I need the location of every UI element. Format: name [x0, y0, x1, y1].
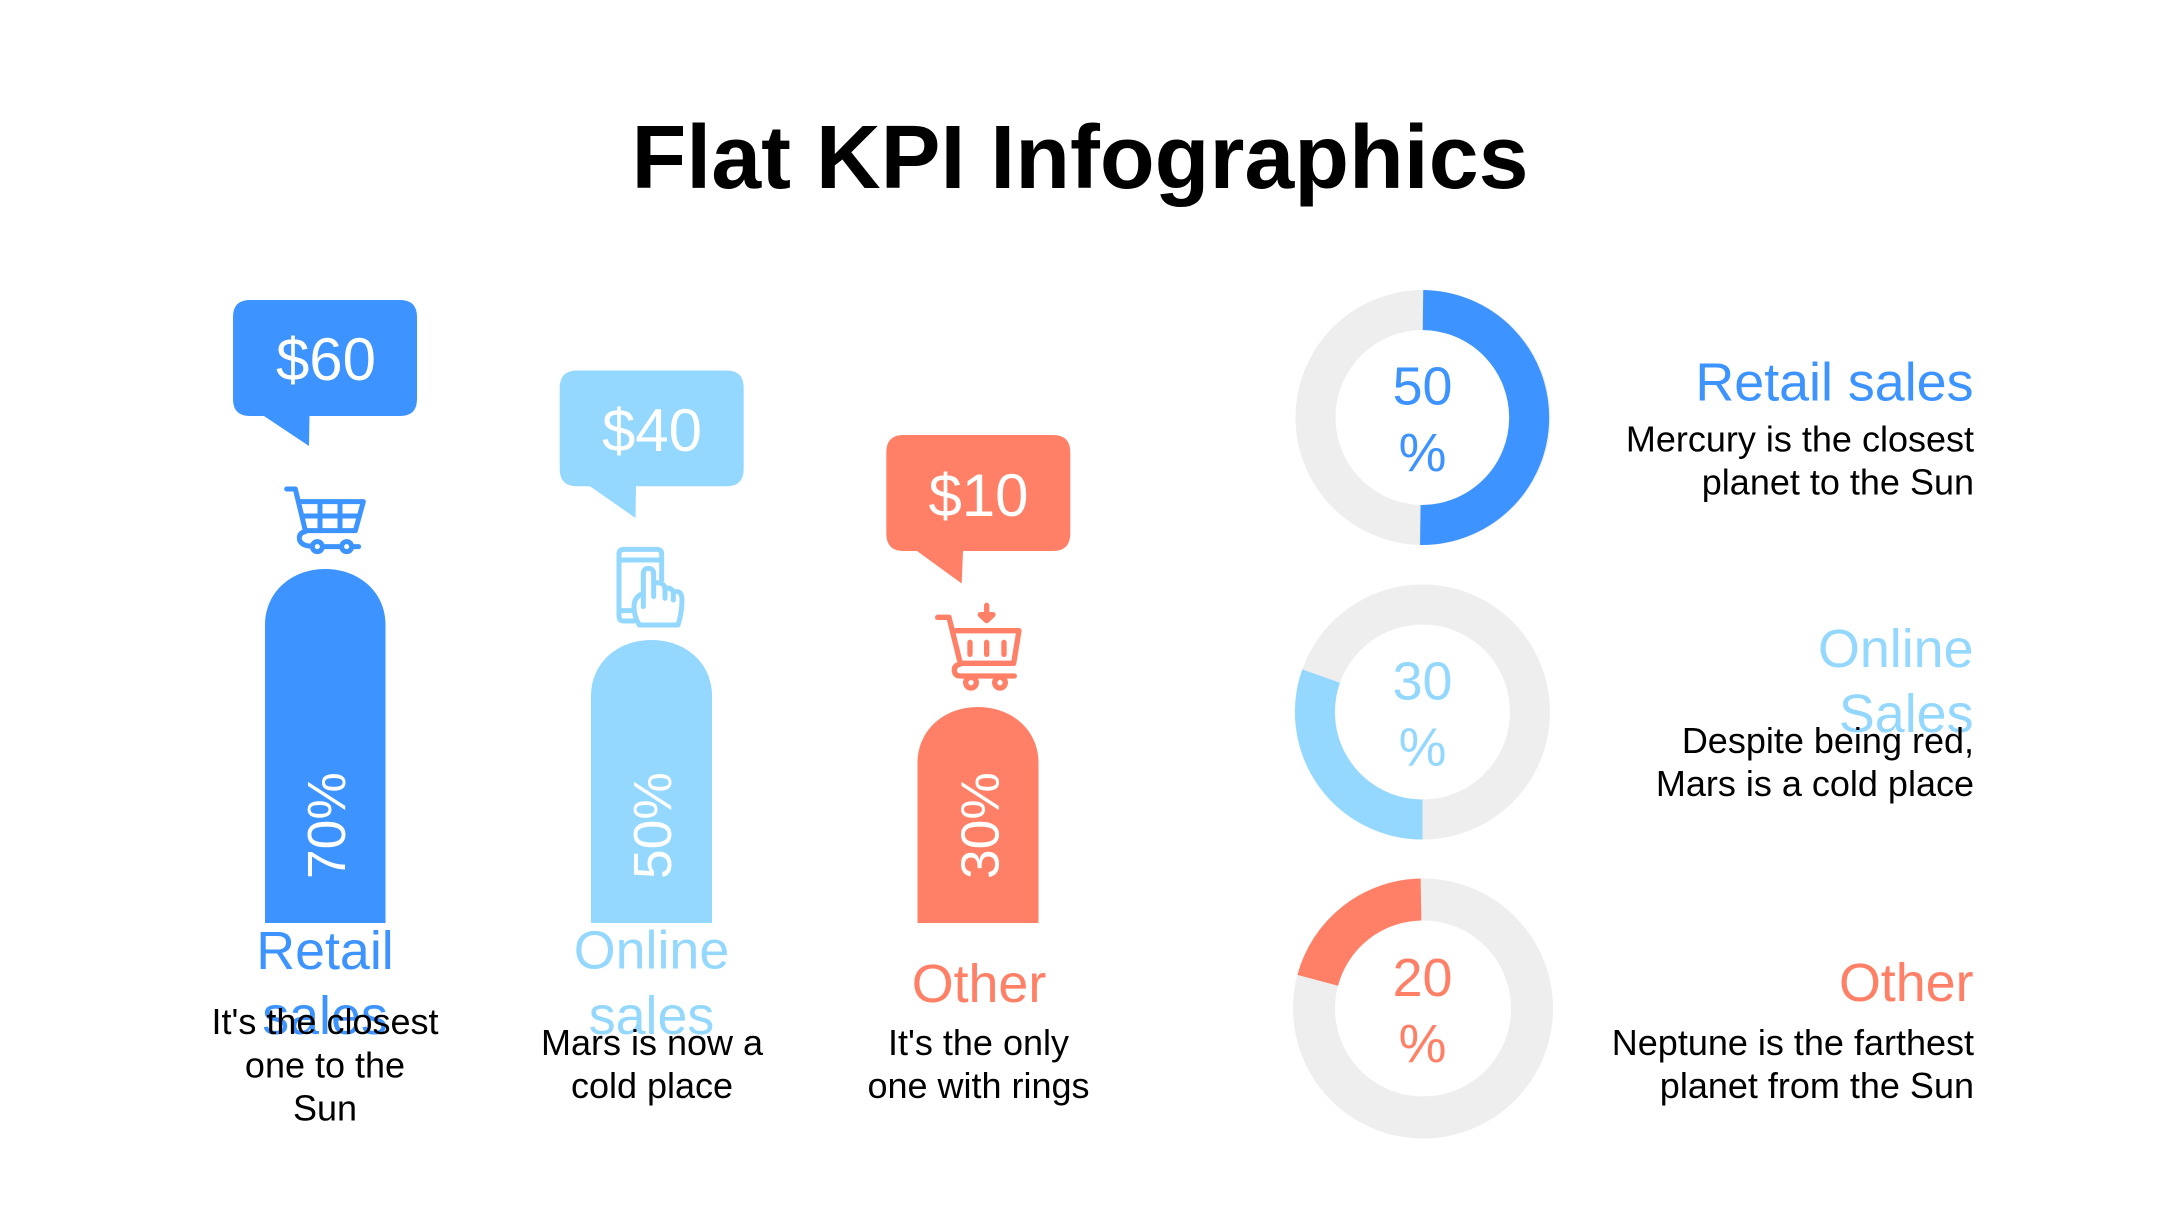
- text: mercury description: [1626, 418, 1974, 502]
- text: other description: [867, 1022, 1090, 1106]
- chart: 30% donut: [1315, 604, 1530, 820]
- icon: shopping cart: [287, 489, 363, 552]
- chart: 20% donut: [1314, 900, 1532, 1118]
- callout: $10 speech bubble: [886, 435, 1070, 584]
- heading: retail sales: [256, 921, 394, 1046]
- text: neptune description: [1612, 1022, 1974, 1106]
- panel: retail sales donut row: [1316, 310, 1974, 525]
- bar: 50%: [591, 640, 712, 923]
- panel: online sales donut row: [1315, 604, 1974, 820]
- text: retail description: Sun: [293, 1088, 357, 1128]
- panel: other column: [867, 435, 1090, 1106]
- text: other description: It's the only: [888, 1022, 1069, 1063]
- heading: online sales: Online: [1818, 619, 1974, 679]
- bar: 70%: [265, 569, 386, 923]
- callout: $60 speech bubble: $60: [276, 326, 376, 393]
- chart: 50% donut: %: [1399, 423, 1446, 483]
- text: online description: cold place: [571, 1065, 733, 1106]
- text: retail description: It's the closest: [212, 1001, 438, 1042]
- panel: retail sales column: [212, 300, 438, 1128]
- chart: 50% donut: 50: [1393, 356, 1452, 416]
- heading: online sales: [574, 920, 729, 1046]
- heading: retail sales: Retail sales: [1695, 352, 1974, 412]
- heading: online sales: Sales: [1839, 684, 1974, 744]
- text: mars description: Despite being red,: [1682, 720, 1974, 761]
- text: neptune description: Neptune is the farthest: [1612, 1022, 1974, 1063]
- heading: other: Other: [1839, 953, 1974, 1013]
- panel: other donut row: [1314, 900, 1974, 1118]
- text: online description: [541, 1022, 764, 1106]
- text: neptune description: planet from the Sun: [1660, 1065, 1974, 1106]
- heading: online sales: Online: [574, 920, 729, 980]
- text: mercury description: planet to the Sun: [1702, 462, 1974, 502]
- bar: 50%: 50%: [624, 772, 683, 879]
- callout: $40 speech bubble: $40: [602, 397, 702, 464]
- text: mars description: Mars is a cold place: [1656, 763, 1974, 804]
- text: mercury description: Mercury is the closest: [1626, 418, 1974, 460]
- bar: 30%: [918, 707, 1038, 923]
- text: mars description: [1656, 720, 1974, 804]
- chart: 30% donut: %: [1399, 718, 1446, 778]
- icon: cart with down arrow: [938, 605, 1019, 688]
- callout: $10 speech bubble: $10: [928, 462, 1029, 529]
- text: online description: Mars is now a: [541, 1022, 764, 1063]
- text: retail description: one to the: [245, 1044, 405, 1086]
- title: Flat KPI Infographics: [632, 108, 1528, 208]
- heading: online sales: sales: [589, 986, 714, 1046]
- callout: $60 speech bubble: [233, 300, 417, 446]
- chart: 20% donut: 20: [1393, 948, 1452, 1008]
- heading: online sales: [1818, 619, 1974, 744]
- text: other description: one with rings: [867, 1065, 1090, 1106]
- bar: 70%: 70%: [298, 772, 357, 879]
- heading: other: Other: [912, 954, 1046, 1014]
- icon: hand tapping phone: [619, 549, 682, 625]
- chart: 30% donut: 30: [1393, 652, 1452, 712]
- chart: 50% donut: [1316, 310, 1530, 525]
- text: retail description: [212, 1001, 438, 1128]
- panel: online sales column: [541, 370, 764, 1106]
- callout: $40 speech bubble: [560, 370, 744, 518]
- bar: 30%: 30%: [952, 772, 1010, 879]
- heading: retail sales: Retail: [256, 921, 394, 981]
- heading: retail sales: sales: [262, 986, 388, 1046]
- chart: 20% donut: %: [1399, 1014, 1446, 1074]
